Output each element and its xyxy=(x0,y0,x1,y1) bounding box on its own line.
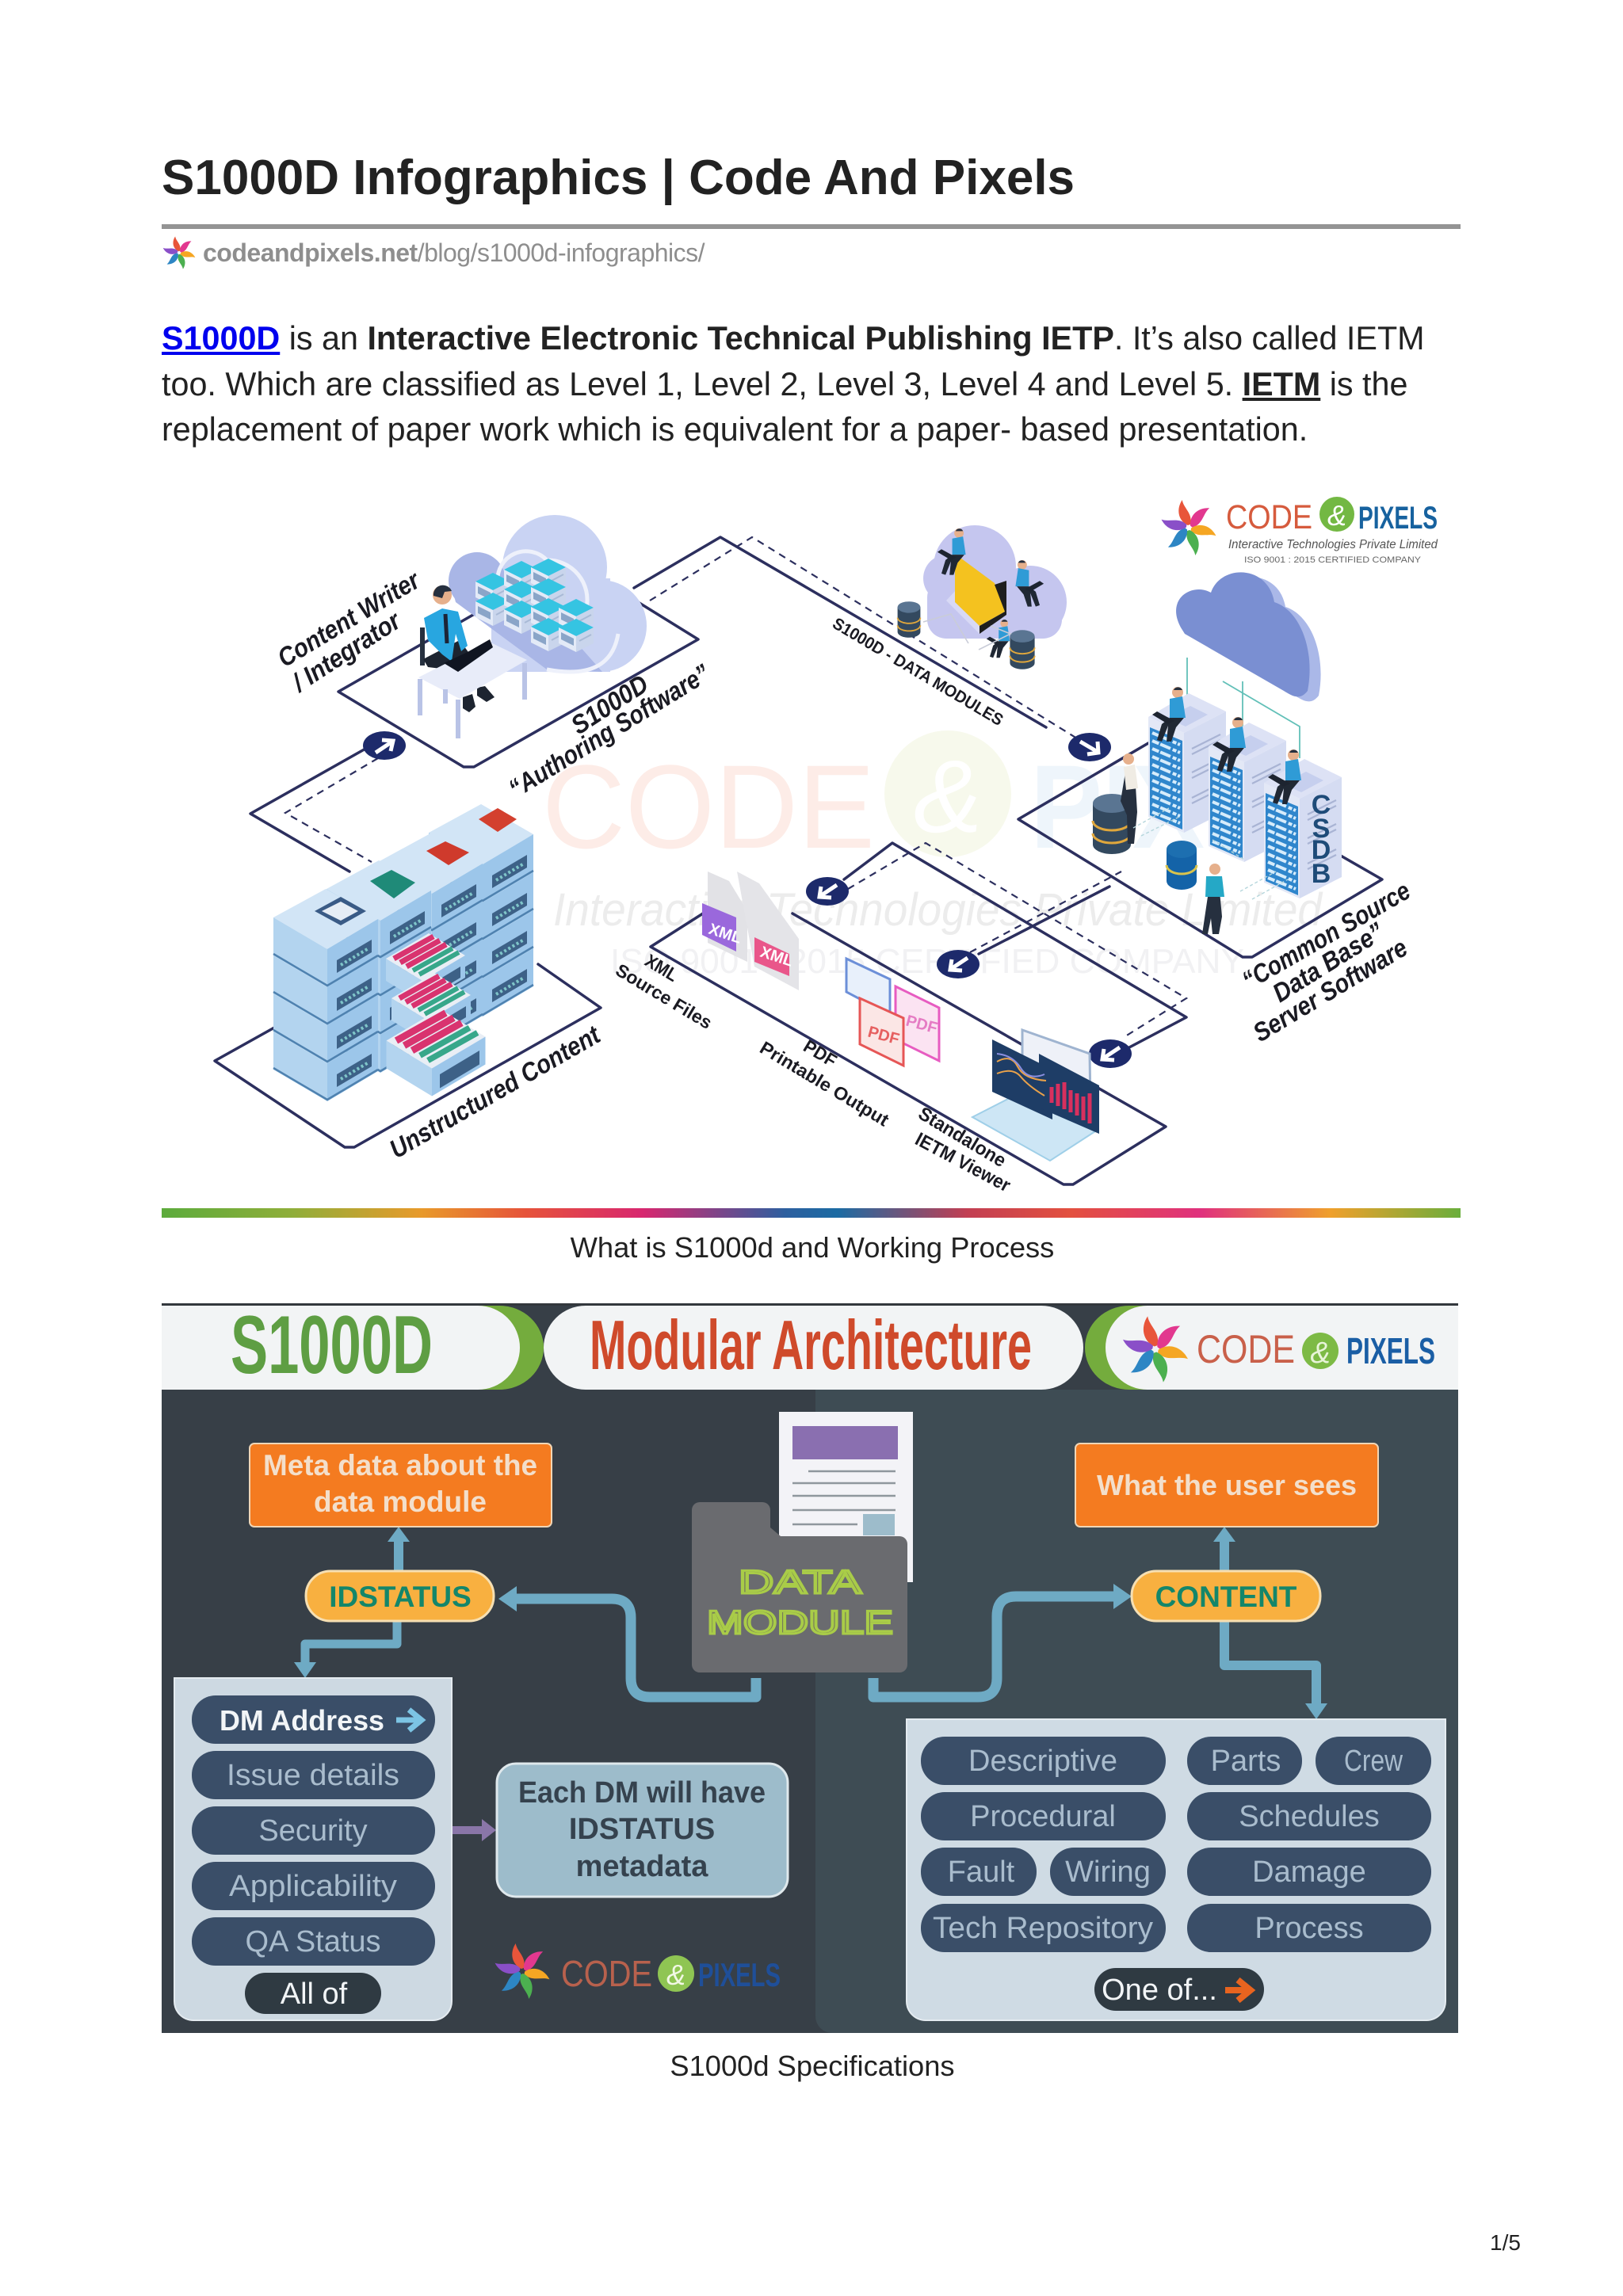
panel: content types: Schedules xyxy=(1239,1800,1380,1833)
box: meta data xyxy=(250,1444,552,1527)
icon: pinwheel logo with company name: PIXELS xyxy=(1358,501,1438,536)
panel: IDSTATUS list: Security xyxy=(258,1814,368,1848)
dashed data flow lines xyxy=(285,537,1186,1036)
icon: XML files: XML xyxy=(758,944,795,971)
icon: pinwheel logo with company name: Interactive Technologies Private Limited xyxy=(1228,538,1438,551)
header rule xyxy=(162,224,1461,229)
watermark xyxy=(542,730,1323,981)
icon: pinwheel logo with company name xyxy=(1160,497,1438,565)
diagram labels: PDF xyxy=(800,1035,841,1071)
intro paragraph: too. Which are classified as Level 1, Level 2, Level 3, Level 4 and Level 5. IETM is the xyxy=(162,366,1407,402)
icon: pinwheel favicon xyxy=(162,236,196,269)
icon: CSDB cloud and towers xyxy=(1093,572,1342,934)
pill: CONTENT xyxy=(1132,1571,1320,1621)
icon: pinwheel logo with company name: & xyxy=(1327,499,1346,532)
diagram labels: Content Writer xyxy=(273,564,426,673)
pill: IDSTATUS: IDSTATUS xyxy=(329,1581,472,1613)
watermark: & xyxy=(914,738,982,854)
icon: data modules cloud xyxy=(898,525,1067,669)
icon: file cabinets xyxy=(273,804,533,1101)
caption: specifications: S1000d Specifications xyxy=(670,2050,955,2082)
icon: PDF files: PDF xyxy=(866,1024,901,1048)
watermark: Interactive Technologies Private Limited xyxy=(553,884,1323,936)
header band: Modular Architecture xyxy=(590,1306,1032,1384)
icon: data module folder xyxy=(692,1412,913,1672)
box: what the user sees: What the user sees xyxy=(1097,1469,1357,1501)
diagram labels: “Authoring Software” xyxy=(503,658,715,803)
icon: CSDB cloud and towers: B xyxy=(1312,859,1331,889)
diagram labels: Standalone xyxy=(915,1103,1010,1172)
panel: content types: Process xyxy=(1254,1912,1364,1945)
platform outlines xyxy=(215,537,1382,1184)
icon: data module folder: DATA xyxy=(739,1563,861,1600)
header band: S1000D xyxy=(231,1299,433,1391)
diagram labels: Printable Output xyxy=(756,1037,893,1131)
icon: XML files xyxy=(702,871,799,990)
panel: content types: Descriptive xyxy=(968,1745,1117,1778)
logo: bottom watermark xyxy=(494,1943,781,2000)
intro paragraph xyxy=(162,320,1425,448)
panel: content types: Wiring xyxy=(1065,1855,1151,1889)
diagram labels: XML xyxy=(641,950,682,986)
icon: CSDB cloud and towers: D xyxy=(1312,835,1331,865)
box: each DM will have IDSTATUS metadata: Each DM will have xyxy=(518,1776,766,1810)
icon: pinwheel logo with company name: ISO 9001 : 2015 CERTIFIED COMPANY xyxy=(1244,555,1422,565)
icon: IETM viewer laptop xyxy=(972,1030,1099,1161)
icon: data module folder: MODULE xyxy=(707,1604,893,1641)
pill: CONTENT: CONTENT xyxy=(1155,1581,1297,1613)
panel: content types: Parts xyxy=(1211,1745,1281,1778)
diagram labels: Source Files xyxy=(612,959,716,1033)
diagram labels: S1000D - DATA MODULES xyxy=(829,615,1006,730)
watermark: PIX xyxy=(1030,740,1205,873)
box: each DM will have IDSTATUS metadata: metadata xyxy=(576,1850,708,1883)
icon: cloud with servers xyxy=(449,515,647,672)
logo: bottom watermark: PIXELS xyxy=(698,1956,781,1993)
box: what the user sees xyxy=(1075,1444,1378,1527)
panel: IDSTATUS list: Issue details xyxy=(227,1759,399,1792)
diagram labels: IETM Viewer xyxy=(911,1128,1014,1196)
diagram labels: S1000D xyxy=(566,669,653,740)
panel: IDSTATUS list xyxy=(174,1678,452,2020)
arrow badges xyxy=(363,731,1132,1068)
panel: IDSTATUS list: DM Address xyxy=(220,1704,384,1737)
icon: PDF files xyxy=(846,959,939,1066)
diagram labels xyxy=(273,564,1415,1196)
panel: content types: Tech Repository xyxy=(933,1912,1153,1945)
panel: IDSTATUS list: Applicability xyxy=(229,1870,397,1903)
box: meta data: Meta data about the xyxy=(263,1449,537,1482)
diagram labels: “Common Source xyxy=(1237,875,1415,995)
panel: IDSTATUS list: QA Status xyxy=(245,1925,381,1958)
icon: PDF files: PDF xyxy=(904,1013,939,1037)
header band: CODE xyxy=(1197,1327,1295,1371)
header band: PIXELS xyxy=(1346,1330,1435,1371)
logo: bottom watermark: & xyxy=(666,1958,685,1991)
diagram: S1000D working process xyxy=(215,497,1438,1196)
icon: content writer at desk xyxy=(418,585,527,738)
panel: content types xyxy=(907,1719,1445,2020)
box: meta data: data module xyxy=(314,1486,487,1518)
pill: IDSTATUS xyxy=(306,1571,494,1621)
header band: & xyxy=(1310,1337,1331,1370)
diagram: modular architecture xyxy=(162,1299,1458,2033)
icon: XML files: XML xyxy=(706,921,743,948)
page number: 1/5 xyxy=(1490,2230,1521,2255)
panel: content types: Crew xyxy=(1344,1745,1403,1778)
arrow: to metadata box xyxy=(453,1826,483,1834)
box: each DM will have IDSTATUS metadata xyxy=(497,1764,788,1897)
title: S1000D Infographics | Code And Pixels xyxy=(162,151,1075,205)
icon: CSDB cloud and towers: S xyxy=(1312,814,1330,844)
diagram labels: Server Software xyxy=(1248,933,1412,1047)
caption: working process: What is S1000d and Working Process xyxy=(571,1231,1054,1264)
panel: IDSTATUS list: All of xyxy=(281,1978,348,2011)
source url: codeandpixels.net/blog/s1000d-infographics/ xyxy=(203,238,705,267)
intro paragraph: replacement of paper work which is equivalent for a paper- based presentation. xyxy=(162,411,1308,448)
diagram labels: Data Base” xyxy=(1267,917,1389,1008)
panel: content types: Procedural xyxy=(970,1800,1116,1833)
panel: content types: Fault xyxy=(948,1855,1015,1889)
connector arrows xyxy=(294,1527,1327,1719)
watermark: CODE xyxy=(542,740,875,873)
logo: bottom watermark: CODE xyxy=(561,1953,652,1994)
panel: content types: Damage xyxy=(1252,1855,1366,1889)
diagram labels: / Integrator xyxy=(285,605,407,698)
box: each DM will have IDSTATUS metadata: IDSTATUS xyxy=(569,1813,715,1846)
icon: pinwheel logo with company name: CODE xyxy=(1226,498,1312,536)
intro paragraph: S1000D is an Interactive Electronic Technical Publishing IETP. It’s also called IETM xyxy=(162,320,1425,357)
icon: CSDB cloud and towers: C xyxy=(1312,790,1331,820)
panel: content types: One of... xyxy=(1102,1974,1217,2007)
diagram labels: Unstructured Content xyxy=(384,1019,606,1164)
watermark: ISO 9001 : 2015 CERTIFIED COMPANY xyxy=(610,942,1244,981)
header band xyxy=(162,1299,1458,1391)
rainbow divider xyxy=(162,1208,1461,1218)
